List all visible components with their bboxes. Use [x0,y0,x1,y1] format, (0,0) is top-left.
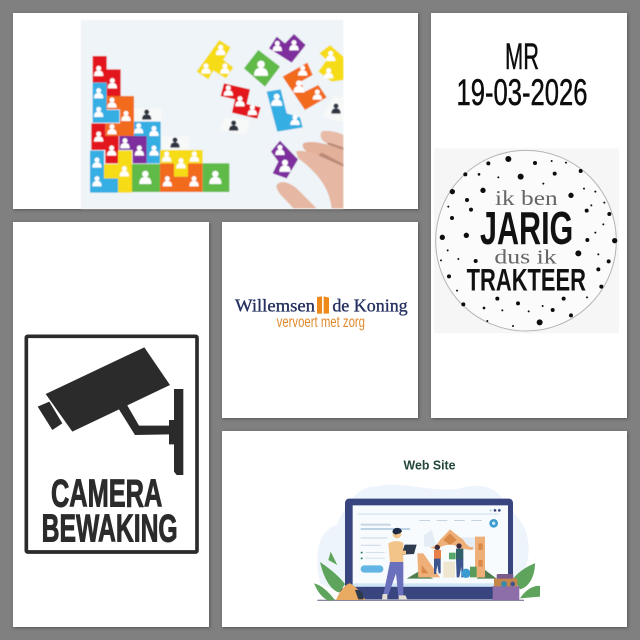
illustration: laptop with developer [314,485,540,601]
logo: Willemsen [235,296,315,316]
logo: de Koning [332,296,408,316]
text: MR and date [456,36,588,113]
sign: camera bewaking [26,336,197,552]
panel: birthday date and sticker [431,13,627,418]
panel: camera surveillance sign [13,222,209,627]
sign: camera bewaking: BEWAKING [42,507,178,551]
photo: colourful puzzle blocks with people icons [81,20,343,209]
sign: camera bewaking: CAMERA [51,472,162,516]
sticker: ik ben jarig dus ik trakteer: dus ik [494,246,557,268]
heading: web site: Web Site [404,458,456,472]
sticker: ik ben jarig dus ik trakteer: TRAKTEER [467,263,586,298]
panel: Willemsen de Koning logo [222,222,418,418]
text: MR and date: MR [505,36,539,77]
panel: web site illustration [222,431,627,627]
panel: team puzzle photo [13,13,418,209]
sticker: ik ben jarig dus ik trakteer: ik ben [495,188,558,210]
logo [235,296,408,331]
sticker: ik ben jarig dus ik trakteer [434,148,619,333]
logo: vervoert met zorg [277,314,365,331]
sticker: ik ben jarig dus ik trakteer: JARIG [480,202,573,254]
